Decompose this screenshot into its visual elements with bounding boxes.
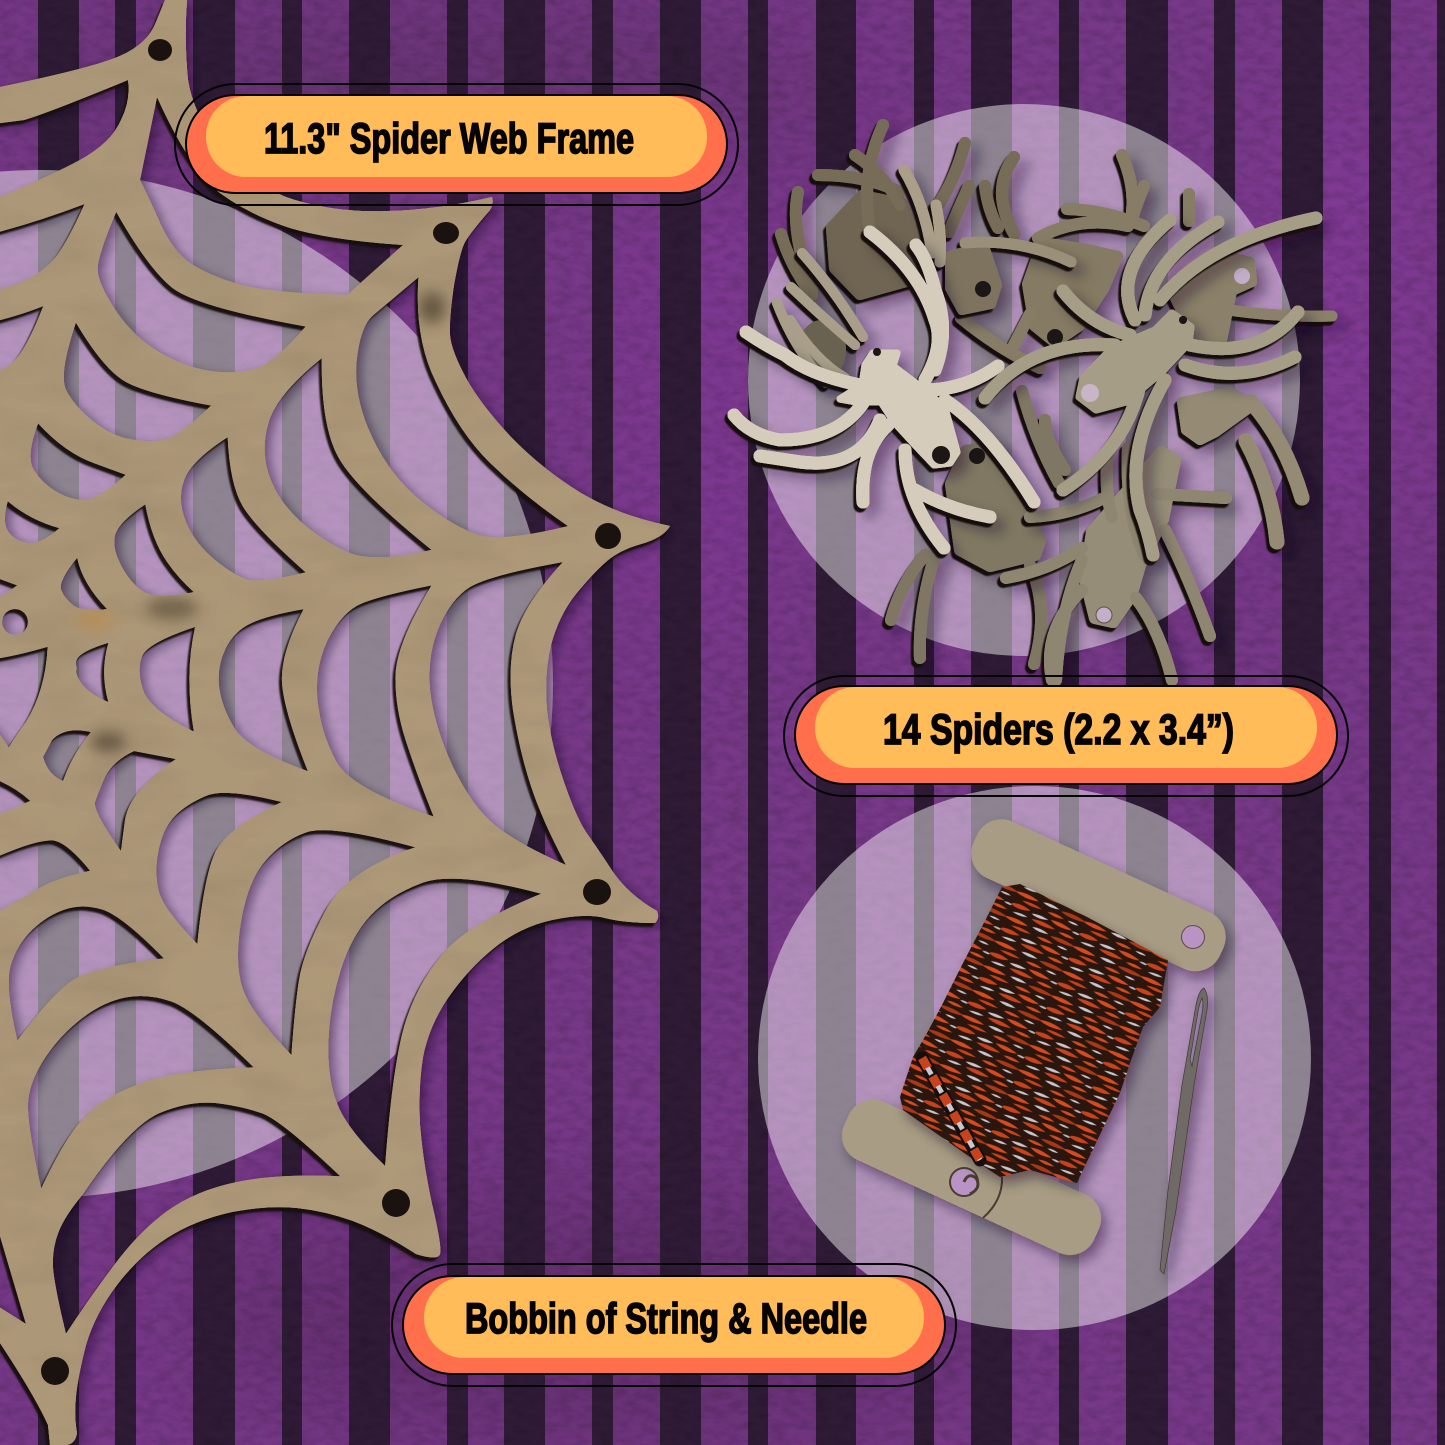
twine windings — [900, 884, 1168, 1183]
spider: back lower left — [891, 391, 1065, 664]
label pill: spiders: 14 Spiders (2.2 x 3.4”) — [883, 706, 1234, 754]
spider: back lower right — [1182, 392, 1302, 542]
spider: back center-top — [961, 155, 1189, 368]
bobbin card — [833, 810, 1235, 1264]
translucent circle behind web frame — [0, 170, 553, 1198]
label pill: bobbin and needle — [392, 1264, 956, 1386]
bobbin of string — [833, 810, 1235, 1274]
spider: back abdomen left-center — [904, 170, 1071, 310]
bobbin slot and curl — [950, 1168, 1002, 1218]
bobbin hole — [1182, 926, 1204, 948]
spider: front tan — [985, 218, 1316, 555]
spider web wooden frame — [0, 0, 670, 1445]
translucent circle behind bobbin — [758, 786, 1311, 1330]
spider: back left, striped legs — [777, 253, 863, 383]
label pill: spiders — [784, 676, 1348, 796]
spider: back top-left — [781, 125, 1014, 295]
needle — [1160, 988, 1208, 1274]
label pill: bobbin and needle: Bobbin of String & Needle — [465, 1295, 867, 1343]
spider pile — [734, 125, 1332, 680]
label pill: spider web frame: 11.3" Spider Web Frame — [264, 115, 634, 163]
translucent circle behind spiders — [748, 104, 1300, 656]
spider: back right abdomen — [1172, 256, 1332, 340]
web mounting holes — [41, 39, 621, 1385]
label pill: spider web frame — [175, 84, 738, 205]
spider: front light — [734, 232, 1034, 548]
spider: back bottom right — [1006, 448, 1226, 680]
web stains — [75, 292, 446, 752]
